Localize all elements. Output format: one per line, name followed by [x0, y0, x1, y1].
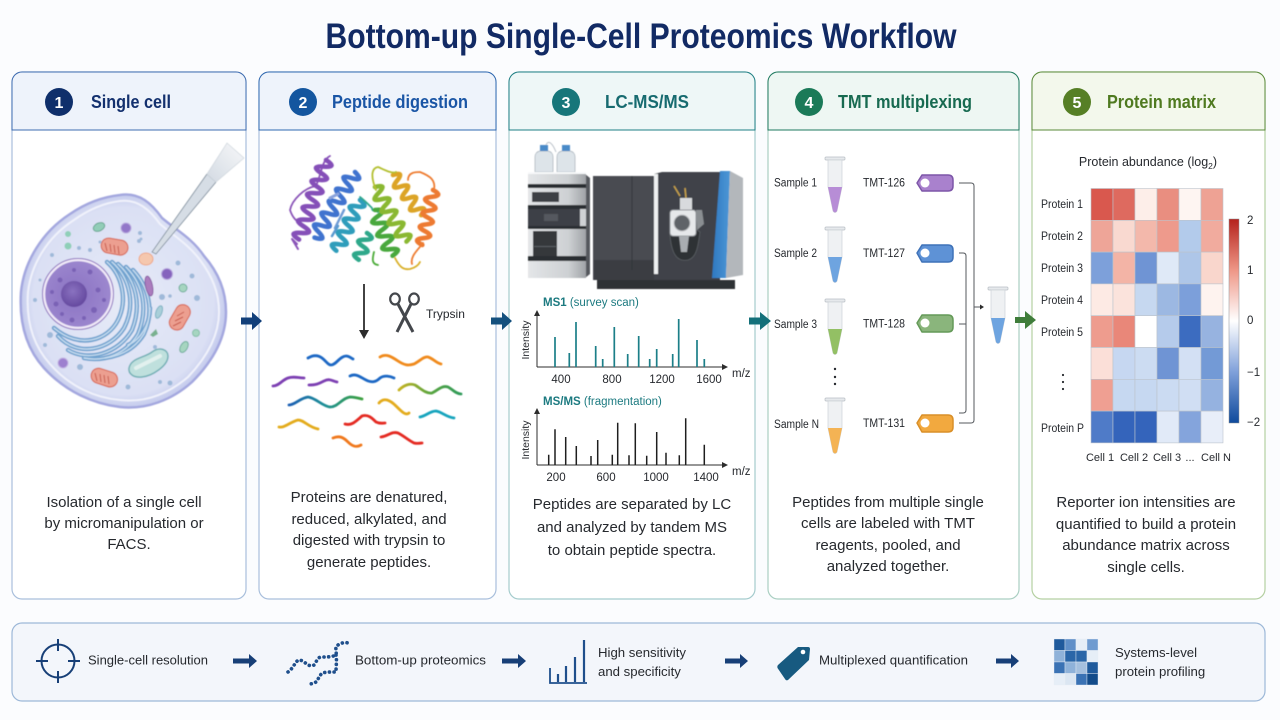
illustration: LC-MS instrument [528, 142, 743, 289]
protein labels: Protein 3 [1041, 263, 1083, 275]
heading: step 5: 5 [1073, 95, 1082, 112]
pooling brackets [959, 183, 982, 423]
heading: step 5: Protein matrix [1107, 92, 1216, 112]
description: TMT multiplexing: cells are labeled with TMT [801, 515, 975, 532]
chart: MS1 spectrum: 800 [602, 374, 622, 386]
description: protein matrix: quantified to build a protein [1056, 516, 1236, 533]
TMT labels: TMT-126 [863, 176, 905, 190]
label: single-cell resolution: Single-cell resolution [88, 652, 208, 668]
description: LC-MS/MS: to obtain peptide spectra. [548, 542, 716, 559]
description: peptide digestion: Proteins are denatured, [291, 489, 447, 506]
heatmap [1091, 188, 1223, 443]
chart title: Protein abundance (log [1079, 155, 1208, 169]
arrow: step 2 to 3 [491, 312, 512, 330]
tube: pooled sample [988, 287, 1008, 344]
description: TMT multiplexing: Peptides from multiple single [792, 494, 984, 511]
dots: more proteins [1062, 374, 1064, 390]
arrow [725, 654, 748, 668]
heading: step 3 [509, 72, 755, 130]
panel: LC-MS/MS [509, 72, 755, 599]
icon: protein grid [1054, 639, 1098, 685]
tube: sample 3 [825, 299, 845, 354]
arrow: step 4 to 5 [1015, 311, 1036, 329]
colorbar legend [1229, 215, 1260, 429]
description: protein matrix: Reporter ion intensities are [1056, 494, 1236, 511]
TMT labels: TMT-127 [863, 246, 905, 260]
description: protein matrix: single cells. [1107, 559, 1185, 576]
chart: MS1 spectrum: 1200 [649, 374, 675, 386]
mass spectrometer [593, 171, 743, 289]
chart title: 2 [1208, 161, 1213, 171]
mitochondria folds [95, 243, 184, 384]
panel: single cell [12, 72, 246, 599]
chart: MS/MS spectrum: m/z [732, 466, 751, 478]
TMT labels: TMT-128 [863, 316, 905, 330]
chart: MS/MS spectrum: 600 [596, 472, 616, 484]
description: LC-MS/MS: Peptides are separated by LC [533, 496, 731, 513]
tube: sample 1 [825, 157, 845, 212]
icon: peptide chain [288, 643, 348, 684]
label: trypsin: Trypsin [426, 307, 465, 321]
arrow [502, 654, 526, 668]
cell labels: ... [1185, 452, 1195, 464]
panel: protein matrix [1032, 72, 1265, 599]
label: bottom-up proteomics: Bottom-up proteomics [355, 652, 487, 668]
chart: MS/MS spectrum: Intensity [520, 420, 532, 460]
icon: bar chart [550, 640, 587, 683]
colorbar legend: −1 [1247, 367, 1260, 379]
label: multiplexed quantification: Multiplexed quantification [819, 652, 968, 668]
description: TMT multiplexing: reagents, pooled, and [815, 537, 961, 554]
heading: step 5 [1032, 72, 1265, 130]
tube: sample 2 [825, 227, 845, 282]
dots: more samples [834, 368, 836, 385]
chart: MS/MS spectrum: MS/MS (fragmentation) [543, 396, 662, 408]
description: single cell: FACS. [107, 536, 151, 553]
tube: sample N [825, 398, 845, 454]
title: Bottom-up Single-Cell Proteomics Workflow [326, 17, 957, 56]
cell labels: Cell 3 [1153, 452, 1181, 464]
cell labels [1086, 452, 1231, 464]
heading: step 4 [768, 72, 1019, 130]
heading: step 3: LC-MS/MS [605, 92, 689, 112]
panel: TMT multiplexing [768, 72, 1019, 599]
colorbar legend: 2 [1247, 215, 1253, 227]
chart: MS/MS spectrum: 1000 [643, 472, 669, 484]
mitochondria [89, 237, 193, 389]
protein labels: Protein 4 [1041, 295, 1084, 307]
source housing [670, 186, 704, 260]
description: protein matrix: abundance matrix across [1062, 537, 1230, 554]
heading: step 4: TMT multiplexing [838, 92, 972, 112]
arrowhead: pooling [980, 304, 984, 310]
protein labels: Protein 5 [1041, 327, 1083, 339]
heading: step 2: Peptide digestion [332, 92, 468, 112]
illustration: peptides [273, 355, 461, 446]
description: peptide digestion: generate peptides. [307, 554, 431, 571]
protein labels: Protein 2 [1041, 231, 1083, 243]
arrow [233, 654, 257, 668]
colorbar legend: −2 [1247, 417, 1260, 429]
chart: MS1 spectrum: Intensity [520, 320, 532, 360]
label: high sensitivity: and specificity [598, 664, 681, 679]
protein labels: Protein P [1041, 423, 1084, 435]
icon: crosshair target [36, 639, 80, 683]
heading: step 2: 2 [299, 95, 308, 112]
cell labels: Cell 1 [1086, 452, 1114, 464]
tag: TMT-126 [917, 175, 953, 191]
TMT labels: TMT-131 [863, 416, 905, 430]
description: peptide digestion: digested with trypsin to [293, 532, 445, 549]
icon: tag [777, 647, 810, 680]
label: high sensitivity: High sensitivity [598, 645, 686, 660]
golgi apparatus [54, 262, 150, 359]
chart: MS1 spectrum: 1600 [696, 374, 722, 386]
arrow: step 3 to 4 [749, 312, 771, 330]
illustration: protein ribbon [290, 156, 439, 269]
heading: step 1 [12, 72, 246, 130]
cell labels: Cell N [1201, 452, 1231, 464]
heading: step 3: 3 [562, 95, 571, 112]
colorbar legend: 0 [1247, 315, 1253, 327]
colorbar legend: 1 [1247, 265, 1253, 277]
LC stack [528, 142, 590, 278]
heading: step 1: 1 [55, 95, 64, 112]
description: single cell: by micromanipulation or [44, 515, 204, 532]
sample labels: Sample 3 [774, 319, 817, 331]
chart: MS1 spectrum: m/z [732, 368, 751, 380]
arrow: step 1 to 2 [241, 312, 262, 330]
vacuole [129, 349, 168, 377]
heading: step 1: Single cell [91, 92, 171, 112]
chart: MS1 spectrum: 400 [551, 374, 571, 386]
tag: TMT-131 [917, 415, 953, 432]
tag: TMT-128 [917, 315, 953, 332]
cell labels: Cell 2 [1120, 452, 1148, 464]
chart: MS/MS spectrum: 1400 [693, 472, 719, 484]
protein labels [1041, 199, 1084, 435]
pipette [139, 143, 244, 265]
heading: step 4: 4 [805, 95, 814, 112]
TMT labels [863, 176, 905, 430]
nucleus [42, 258, 114, 330]
description: peptide digestion: reduced, alkylated, and [291, 511, 447, 528]
panel: peptide digestion [259, 72, 496, 599]
chart: MS1 spectrum: MS1 (survey scan) [543, 297, 639, 309]
illustration: cell with pipette [21, 143, 244, 408]
description: single cell: Isolation of a single cell [46, 494, 202, 511]
arrow: digestion [359, 284, 369, 339]
sample labels: Sample N [774, 419, 819, 431]
heading: step 2 [259, 72, 496, 130]
chart: MS1 spectrum [520, 297, 751, 386]
organelles [33, 221, 200, 390]
label: systems-level profiling: Systems-level [1115, 645, 1197, 660]
chart title: ) [1213, 155, 1217, 169]
description: LC-MS/MS: and analyzed by tandem MS [537, 519, 727, 536]
chart: MS/MS spectrum: 200 [546, 472, 566, 484]
tag: TMT-127 [917, 245, 953, 262]
sample labels: Sample 2 [774, 248, 817, 260]
protein labels: Protein 1 [1041, 199, 1083, 211]
arrow [996, 654, 1019, 668]
panel: summary strip [12, 623, 1265, 701]
label: systems-level profiling: protein profiling [1115, 664, 1205, 679]
description: TMT multiplexing: analyzed together. [827, 558, 949, 575]
sample labels [774, 178, 819, 431]
icon: scissors [390, 294, 419, 332]
sample labels: Sample 1 [774, 178, 817, 190]
chart: MS/MS spectrum [520, 396, 751, 484]
